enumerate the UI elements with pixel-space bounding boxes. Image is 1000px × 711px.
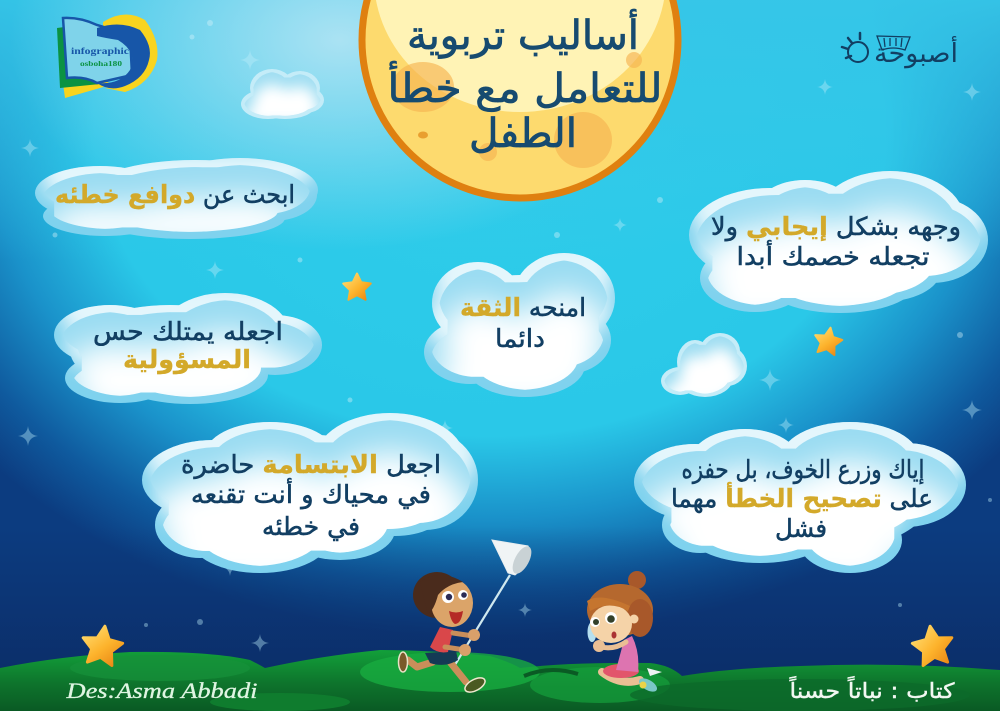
- cloud text: في محياك و أنت تقنعه: [191, 477, 431, 510]
- cloud text: دائما: [495, 324, 545, 353]
- boy with net: [398, 540, 535, 695]
- logo: osboha sun: أصبوحة: [874, 35, 958, 69]
- logo: infographic book: [57, 14, 158, 98]
- boy legs: [408, 660, 433, 667]
- cloud: correct the mistake: [634, 422, 966, 573]
- cloud text: إياك وزرع الخوف، بل حفزه: [682, 455, 924, 485]
- star: [80, 623, 125, 667]
- cloud text: في خطئه: [262, 512, 360, 541]
- cloud text: [93, 317, 283, 375]
- star: [343, 274, 371, 300]
- cloud text: [460, 293, 586, 353]
- title text: للتعامل مع خطأ: [388, 61, 662, 112]
- logo text: infographic: [71, 47, 129, 57]
- cloud: smile: [142, 413, 478, 573]
- logo: osboha sun: [842, 33, 958, 69]
- cloud: responsibility: [54, 293, 322, 404]
- cloud: look for motives: [35, 158, 318, 239]
- cloud text: وجهه بشكل إيجابي ولا: [711, 212, 961, 242]
- cloud text: تجعله خصمك أبدا: [736, 239, 930, 271]
- designer credit: Des:Asma Abbadi: [65, 678, 258, 703]
- small cloud right: [661, 333, 747, 397]
- girl with magnifier: [587, 571, 662, 694]
- net: [453, 540, 535, 668]
- cloud shape: [35, 158, 318, 239]
- moon craters: [392, 52, 642, 168]
- cloud text: اجعل الابتسامة حاضرة: [181, 450, 441, 479]
- moon with title: [362, 0, 678, 198]
- cloud shape: [54, 293, 322, 404]
- cloud: be positive: [689, 171, 988, 313]
- cloud text: [711, 212, 961, 271]
- cloud text: [671, 455, 933, 543]
- title text: الطفل: [469, 111, 577, 157]
- cloud shape: [689, 171, 988, 313]
- cloud text: على تصحيح الخطأ مهما: [671, 482, 933, 514]
- cloud text: [181, 450, 441, 541]
- cloud text: اجعله يمتلك حس: [93, 317, 283, 346]
- green hills: [0, 650, 1000, 711]
- book credit: كتاب : نباتاً حسناً: [789, 675, 954, 703]
- cloud text: فشل: [775, 514, 827, 543]
- logo text handle: osboha180: [80, 60, 123, 68]
- title text: أساليب تربوية: [407, 9, 639, 59]
- cloud shape: [424, 253, 615, 397]
- cloud: give confidence: [424, 253, 615, 397]
- cloud shape: [142, 413, 478, 573]
- star: [812, 325, 844, 356]
- star: [910, 623, 955, 667]
- cloud text: المسؤولية: [123, 345, 251, 375]
- title text: [388, 9, 662, 157]
- small cloud top: [241, 69, 324, 119]
- cloud shape: [634, 422, 966, 573]
- cloud text: ابحث عن دوافع خطئه: [55, 180, 295, 210]
- cloud text: امنحه الثقة: [460, 293, 586, 322]
- boy head: [413, 572, 461, 618]
